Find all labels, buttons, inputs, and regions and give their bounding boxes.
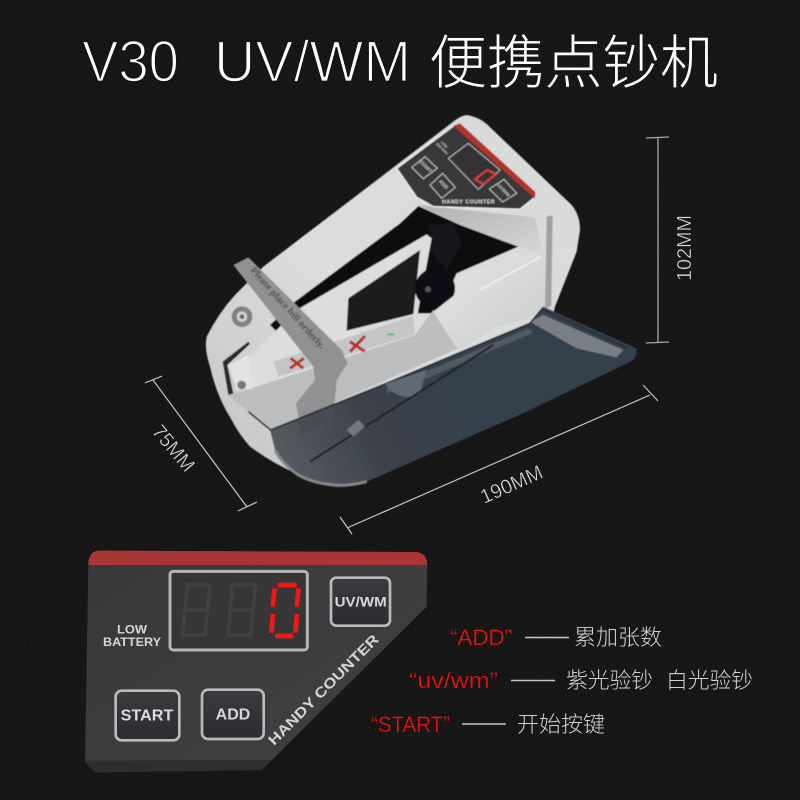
strap seen through tray (298, 407, 334, 435)
tray front lip (387, 328, 533, 393)
transparent tray (270, 307, 637, 485)
housing highlight (480, 257, 541, 290)
drive block (430, 223, 462, 270)
low battery label: LOW (440, 141, 449, 149)
gray strap with printed text (233, 257, 348, 435)
legend: ADD: “ADD” (450, 625, 512, 650)
counter floor (228, 310, 458, 430)
uv button: UV/WM (496, 183, 511, 198)
display window (170, 571, 307, 650)
panel plate (85, 551, 427, 772)
legend: uv/wm: 白光验钞 (666, 663, 753, 695)
legend: ADD: 累加张数 (574, 620, 662, 652)
legend: uv/wm (409, 663, 753, 695)
dark interior (270, 206, 518, 332)
dimension: width 190MM (340, 385, 658, 534)
rail clip (347, 420, 365, 437)
red cross marks (290, 336, 365, 368)
red band (88, 551, 427, 565)
legend: ADD (450, 620, 662, 652)
green tick (387, 332, 394, 337)
legend: START: “START” (371, 712, 450, 737)
add button: ADD (437, 179, 449, 191)
handy counter label: HANDY COUNTER (266, 631, 383, 749)
inner wall plate (248, 234, 432, 388)
tray back corner (530, 315, 623, 357)
bill clip head (228, 355, 253, 391)
lower dark band (85, 760, 272, 772)
product photo: handy counter machine (206, 115, 637, 485)
brand logo (232, 306, 252, 327)
low battery label: BATTERY (435, 142, 450, 156)
start button (116, 691, 179, 740)
low battery label (103, 623, 161, 649)
dimension: depth 75MM (145, 376, 257, 511)
title (82, 16, 718, 100)
panel name: HANDY COUNTER (442, 200, 495, 206)
dimension: height 102MM: 102MM (674, 215, 696, 281)
low battery label: LOW (117, 623, 148, 637)
legend: START (371, 707, 605, 739)
gray strap with printed text: Please place bill orderly. (248, 265, 327, 352)
start button: START (417, 159, 433, 174)
red digit zero (271, 585, 299, 636)
control panel on machine (397, 123, 535, 209)
instruction label (273, 316, 415, 377)
sloped hood (418, 205, 543, 254)
start button: START (121, 708, 174, 725)
add button: ADD (216, 707, 250, 724)
left frame edge (223, 342, 250, 395)
machine body (206, 115, 580, 475)
legend: uv/wm: 紫光验钞 (566, 663, 653, 695)
tray finger notch (385, 370, 427, 397)
low battery label: BATTERY (103, 635, 161, 649)
roller housing (433, 255, 545, 351)
title: 便携点钞机 (429, 16, 718, 100)
black screen (347, 250, 420, 331)
tray lip line (248, 307, 543, 430)
legend: START: 开始按键 (517, 707, 605, 739)
tray outer rim (275, 450, 367, 485)
display digit (475, 170, 496, 184)
uv/wm button: UV/WM (335, 594, 387, 609)
tray back rim (543, 310, 628, 348)
display window (448, 143, 500, 189)
tray rail (310, 345, 493, 462)
title: V30 (82, 30, 179, 94)
legend: uv/wm: “uv/wm” (409, 668, 498, 693)
title: UV/WM (214, 30, 411, 94)
roller knob (415, 268, 455, 308)
enlarged control panel (85, 551, 427, 772)
dimension: width 190MM: 190MM (477, 462, 546, 509)
right seam (545, 215, 553, 308)
dimension: depth 75MM: 75MM (147, 421, 199, 477)
add button (202, 690, 264, 739)
uv/wm button (331, 578, 390, 626)
